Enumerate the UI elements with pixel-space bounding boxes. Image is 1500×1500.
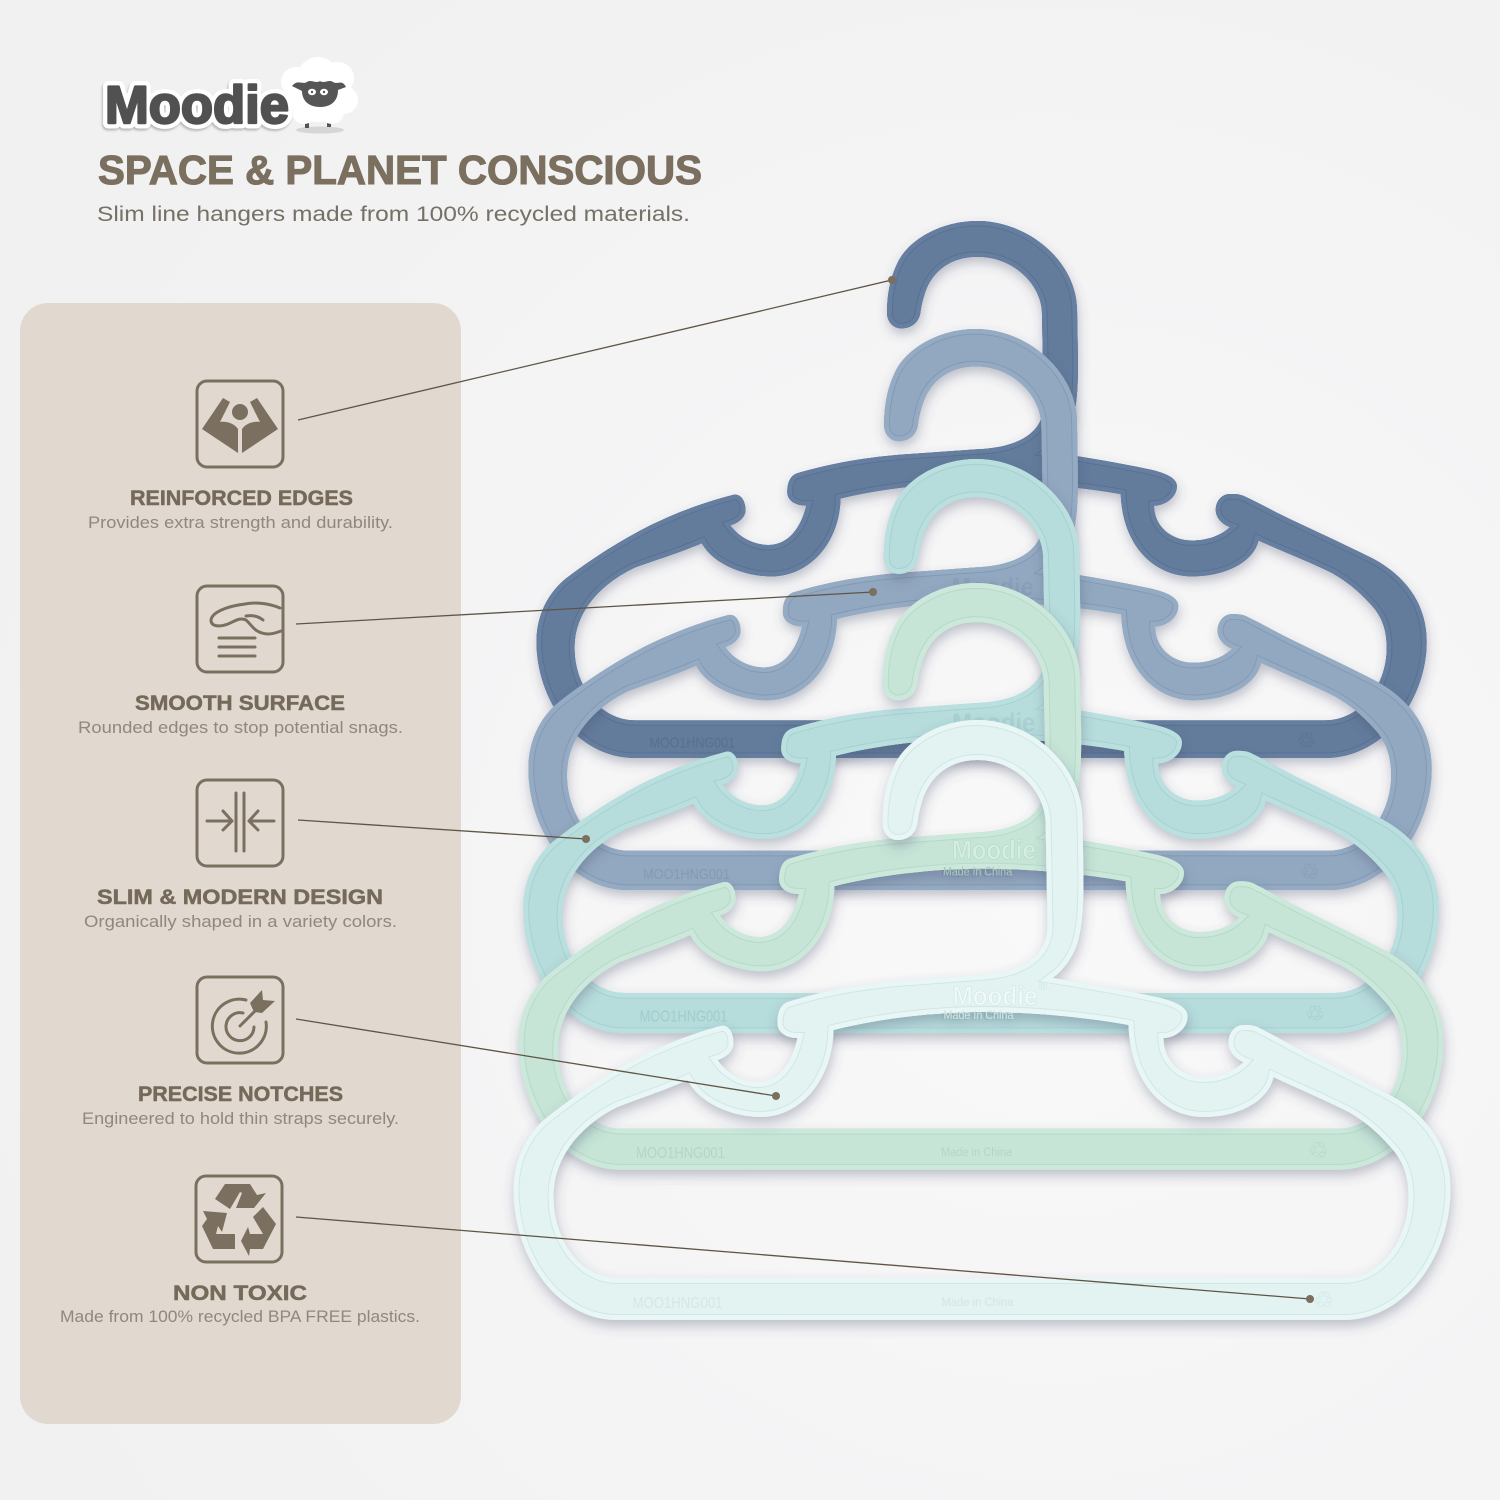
- feature: non toxic: [60, 1176, 420, 1326]
- icon: smooth fabric: [197, 586, 283, 672]
- hanger: pale aqua: MOO1HNG001: [632, 1295, 723, 1312]
- logo sheep: [278, 57, 358, 134]
- subheading: Slim line hangers made from 100% recycled materials.: [97, 202, 690, 226]
- feature: smooth surface: [78, 586, 403, 737]
- logo: Moodie: [105, 57, 358, 135]
- feature: reinforced edges: [88, 381, 393, 532]
- feature: slim and modern design: [84, 780, 397, 931]
- hanger: pale aqua: [514, 720, 1450, 1320]
- hanger: pale aqua: ♲: [1314, 1288, 1334, 1314]
- hanger: mint: [519, 583, 1443, 1170]
- icon: target: [197, 977, 283, 1063]
- hanger: grey blue: [528, 329, 1432, 890]
- hanger: teal: Made in China: [941, 1010, 1012, 1023]
- hanger: grey blue: Made in China: [941, 868, 1011, 880]
- callout line: recycle mark to non toxic: [296, 1217, 1314, 1303]
- heading: PRECISE NOTCHES: [138, 1083, 343, 1106]
- hanger: grey blue: Moodie: [952, 574, 1034, 601]
- hanger: pale aqua: Made In China: [944, 1008, 1014, 1022]
- logo wordmark: Moodie: [105, 76, 289, 135]
- hanger: pale aqua: ®: [1038, 979, 1048, 993]
- heading: SMOOTH SURFACE: [135, 692, 345, 715]
- callout line: hanger bar to smooth surface: [296, 588, 877, 624]
- icon: slim arrows: [197, 780, 283, 866]
- callout line: notch to precise notches: [296, 1019, 780, 1100]
- description: Provides extra strength and durability.: [88, 513, 393, 532]
- hanger: teal: MOO1HNG001: [640, 1009, 728, 1026]
- hanger: teal: Moodie: [952, 708, 1035, 738]
- hanger: dark blue: [536, 221, 1427, 758]
- hanger: dark blue: ♲: [1296, 729, 1316, 753]
- icon: recycle: [196, 1176, 282, 1262]
- description: Made from 100% recycled BPA FREE plastics.: [60, 1307, 420, 1326]
- hanger: dark blue: MOO1HNG001: [650, 736, 735, 751]
- callout line: shoulder to slim design: [298, 820, 590, 843]
- hanger: grey blue: ♲: [1300, 860, 1319, 885]
- feature: precise notches: [82, 977, 399, 1128]
- heading: SLIM & MODERN DESIGN: [97, 886, 383, 909]
- description: Engineered to hold thin straps securely.: [82, 1109, 399, 1128]
- heading: NON TOXIC: [173, 1282, 307, 1305]
- description: Rounded edges to stop potential snags.: [78, 718, 403, 737]
- hanger: teal: [523, 459, 1439, 1033]
- hanger: mint: Made In China: [943, 865, 1013, 878]
- hanger: grey blue: MOO1HNG001: [643, 866, 730, 883]
- description: Organically shaped in a variety colors.: [84, 912, 397, 931]
- callout line: hook to reinforced edges: [298, 276, 896, 420]
- main heading: SPACE & PLANET CONSCIOUS: [98, 147, 702, 193]
- hanger: mint: MOO1HNG001: [636, 1145, 725, 1162]
- hanger: teal: ♲: [1305, 1002, 1325, 1028]
- hangers stack: [514, 221, 1450, 1320]
- hanger: mint: Made in China: [941, 1146, 1013, 1159]
- hanger: dark blue: Made in China: [943, 737, 1012, 748]
- hanger: pale aqua: Made in China: [942, 1295, 1014, 1309]
- heading: REINFORCED EDGES: [130, 487, 353, 510]
- logo wordmark: Moodie: [105, 76, 289, 135]
- hanger: mint: Moodie: [952, 835, 1036, 865]
- panel: features: [20, 303, 461, 1424]
- hanger: pale aqua: Moodie: [952, 981, 1038, 1011]
- hanger: mint: ♲: [1308, 1138, 1329, 1164]
- icon: strength: [197, 381, 283, 467]
